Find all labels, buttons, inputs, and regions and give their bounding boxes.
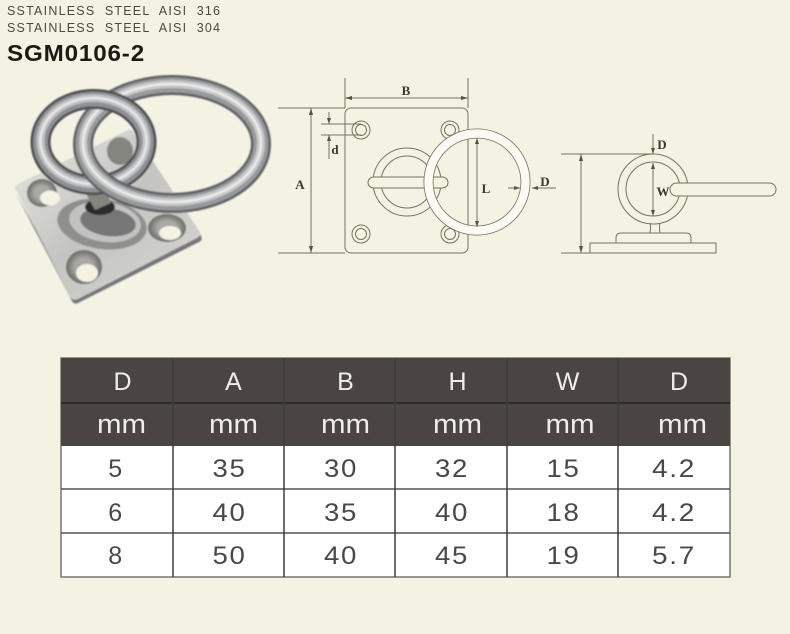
header row: units: mm [433,409,482,439]
material text: SSTAINLESS STEEL AISI 304 [7,21,220,35]
eye ring [618,154,688,224]
base plate [15,130,200,300]
row: D 6: 40 [435,499,469,527]
dimension D: D [657,137,667,152]
row: D 8 [108,542,696,570]
plate outline [345,108,468,253]
dimension B: B [402,83,411,98]
eye ring [373,148,441,216]
plate edge [15,192,202,304]
row: D 5: 4.2 [652,455,696,483]
row: D 6: 35 [324,499,358,527]
dimension A: A [295,177,305,192]
row: D 5: 5 [108,455,124,483]
header row: dimensions: B [337,368,354,396]
row: D 6 [108,499,696,527]
ring bar [368,177,448,188]
header row: units [97,409,707,439]
photo: stainless steel eye plate with ring [15,84,261,304]
side view drawing [561,134,776,253]
small ring [40,98,146,185]
table body [61,358,730,577]
header row: units: mm [546,409,594,439]
header row: dimensions: A [225,368,242,396]
ring bar [670,183,776,196]
header row: units: mm [658,409,707,439]
neck and base [590,223,716,253]
top view drawing [278,78,556,253]
dimension d: d [331,142,339,157]
row: D 8: 19 [546,542,580,570]
row: D 5: 32 [435,455,469,483]
centre boss [54,186,150,255]
dimension d [321,112,361,159]
large ring, front [84,173,230,212]
header row: dimensions: W [556,368,580,396]
dimension L: L [482,181,491,196]
header row: units: mm [209,409,258,439]
specification table [61,358,730,577]
row: D 5: 35 [212,455,246,483]
row: D 8: 45 [435,542,469,570]
title: SGM0106-2 [7,40,145,66]
row: D 8: 8 [108,542,124,570]
table header [61,358,730,446]
row: D 6: 18 [546,499,580,527]
material text [7,4,220,35]
header row: dimensions [113,368,688,396]
large ring, back [83,84,261,203]
header row: dimensions: D [670,368,688,396]
row: D 5: 15 [546,455,580,483]
dimension D [508,174,556,190]
emblem [107,137,133,165]
row: D 6: 4.2 [652,499,696,527]
dimension H [561,154,657,253]
material text: SSTAINLESS STEEL AISI 316 [7,4,220,18]
header row: units: mm [97,409,146,439]
dimension A [278,108,345,253]
header row: units: mm [321,409,370,439]
mounting holes [27,179,186,284]
dimension L [475,138,491,227]
row: D 5: 30 [324,455,358,483]
row: D 8: 40 [324,542,358,570]
dimension W: W [656,184,670,199]
header row: dimensions: D [113,368,132,396]
row: D 8: 5.7 [652,542,696,570]
row: D 6: 40 [212,499,246,527]
dimension W [651,163,670,216]
mounting holes [352,121,459,243]
row: D 5 [108,455,696,483]
header row: dimensions: H [448,368,467,396]
dimension D [651,134,667,154]
row: D 6: 6 [108,499,124,527]
dimension B [345,78,468,108]
large ring [428,134,526,230]
row: D 8: 50 [212,542,246,570]
dimension D: D [540,174,550,189]
